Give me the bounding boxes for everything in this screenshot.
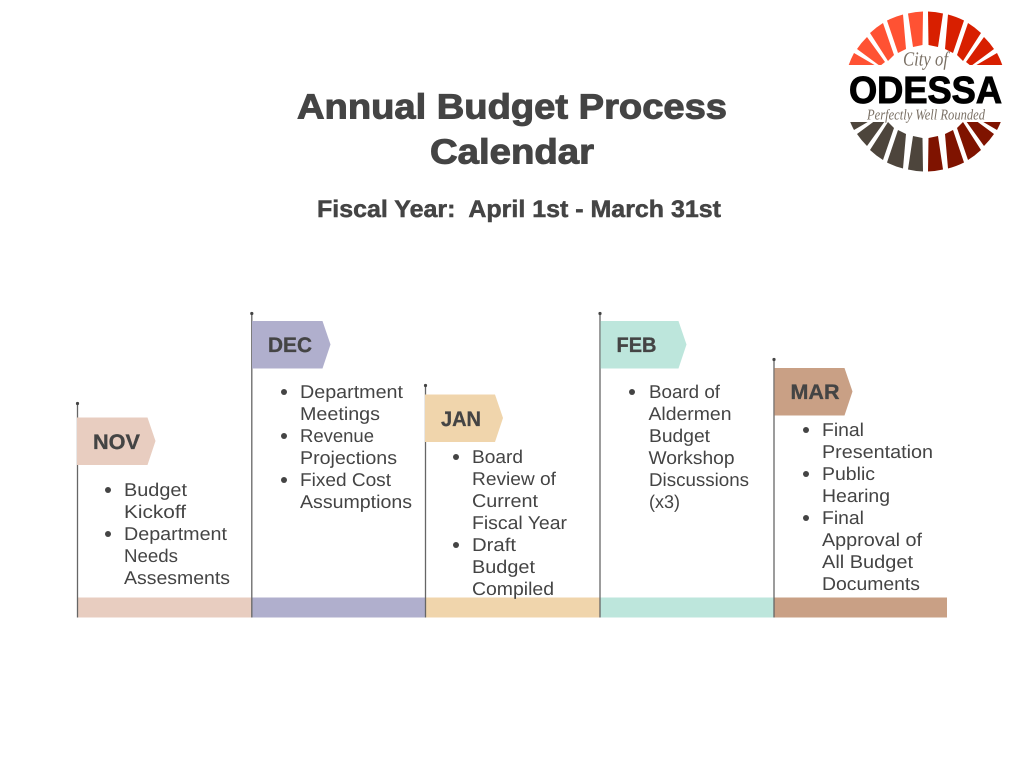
flag: JAN	[425, 394, 503, 442]
list: DEC items: Assumptions	[300, 491, 412, 512]
list: DEC items: Fixed Cost	[300, 469, 391, 490]
flag: MAR: MAR	[790, 381, 840, 404]
logo: City of Odessa: Perfectly Well Rounded	[866, 108, 985, 124]
list: DEC items: Projections	[300, 447, 397, 468]
flag: FEB	[600, 321, 686, 368]
flag: MAR	[774, 368, 852, 416]
list: MAR items: Public	[822, 463, 875, 484]
list: DEC items: Meetings	[300, 403, 380, 424]
list: FEB items: Aldermen	[648, 403, 732, 424]
list: JAN items: Fiscal Year	[472, 512, 567, 533]
panel: February	[598, 312, 749, 618]
list: FEB items: Board of	[649, 381, 721, 402]
list: DEC items: Revenue	[300, 425, 374, 446]
logo: City of Odessa	[846, 12, 1005, 172]
list: NOV items: Needs	[124, 545, 178, 566]
list: MAR items: Hearing	[822, 485, 890, 506]
flag: FEB: FEB	[616, 334, 656, 357]
logo: City of Odessa: City of	[903, 48, 950, 70]
list: FEB items: Workshop	[648, 447, 734, 468]
list: JAN items: Compiled	[472, 578, 554, 599]
flag: DEC: DEC	[268, 334, 312, 357]
flag: JAN: JAN	[441, 408, 481, 431]
list: FEB items: Discussions	[649, 469, 749, 490]
list: MAR items: All Budget	[822, 551, 913, 572]
list: NOV items: Budget	[124, 479, 187, 500]
list: JAN items: Budget	[472, 556, 535, 577]
list: FEB items	[629, 381, 749, 512]
list: NOV items: Department	[124, 523, 227, 544]
list: MAR items: Final	[822, 507, 864, 528]
list: MAR items: Final	[822, 419, 864, 440]
list: DEC items: Department	[300, 381, 403, 402]
list: MAR items: Documents	[822, 573, 920, 594]
panel: December	[250, 312, 412, 618]
title	[297, 88, 727, 172]
logo: City of Odessa: ODESSA	[849, 70, 1002, 112]
subtitle: fiscal year: Fiscal Year: April 1st - March 31st	[317, 196, 721, 223]
title: Annual Budget Process	[297, 88, 727, 126]
list: NOV items: Assesments	[124, 567, 230, 588]
list: MAR items	[803, 419, 933, 594]
list: JAN items: Board	[472, 446, 523, 467]
list: NOV items: Kickoff	[124, 501, 187, 522]
panel: November	[76, 402, 230, 618]
timeline bar	[77, 598, 947, 618]
panel: January	[424, 384, 567, 618]
list: MAR items: Presentation	[822, 441, 933, 462]
list: JAN items	[453, 446, 567, 599]
list: JAN items: Draft	[472, 534, 516, 555]
flag: NOV: NOV	[93, 431, 140, 454]
list: JAN items: Review of	[472, 468, 557, 489]
panel: March	[772, 358, 933, 618]
list: DEC items	[281, 381, 412, 512]
infographic canvas	[76, 12, 1002, 618]
list: JAN items: Current	[472, 490, 538, 511]
flag: DEC	[252, 321, 330, 368]
flag: NOV	[77, 418, 156, 465]
list: FEB items: (x3)	[649, 491, 680, 512]
title: Calendar	[430, 132, 594, 172]
list: FEB items: Budget	[649, 425, 710, 446]
list: MAR items: Approval of	[822, 529, 923, 550]
list: NOV items	[105, 479, 230, 588]
